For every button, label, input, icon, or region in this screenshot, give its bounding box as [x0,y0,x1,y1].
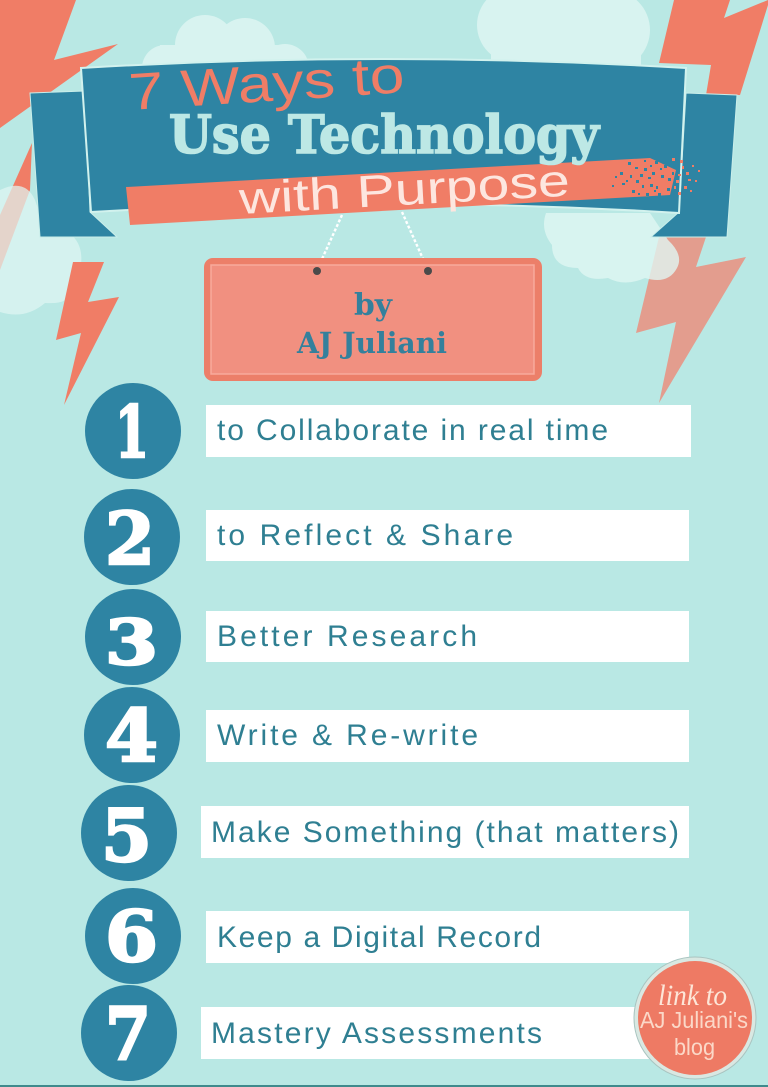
list item 6: Keep a Digital Record [217,921,541,954]
list item 1 [85,383,691,479]
stripe speckle [612,160,674,196]
list item 5: 5 [101,793,152,878]
list item 2: to Reflect & Share [217,519,513,552]
lightning bolt: small left [56,262,119,405]
lightning bolt: lower right pale [636,237,746,403]
list item 5 [81,785,689,881]
author text: by [354,288,394,323]
cloud: left [0,186,81,315]
heading: Use Technology: Use Technology [169,105,601,166]
sign strings [317,212,428,270]
ribbon left tail [30,91,117,237]
list item 4 [84,687,689,783]
ribbon right tail [651,93,737,237]
list item 3 [85,589,689,685]
list item 4: 4 [105,693,158,778]
salmon stripe [126,158,676,225]
list item 4: Write & Re-write [217,719,478,752]
cloud: top centre [142,15,309,92]
author sign [204,258,542,381]
cloud: right [544,213,679,282]
ribbon banner [30,46,737,237]
list item 2 [84,489,689,585]
heading: with Purpose: with Purpose [236,155,571,224]
lightning bolt: top right [659,0,768,95]
list item 7: Mastery Assessments [211,1017,542,1050]
blog link badge: AJ Juliani's [640,1007,748,1033]
blog link badge: link to [658,979,727,1012]
list item 5: Make Something (that matters) [211,816,679,849]
blog link badge: blog [674,1034,715,1060]
lightning bolt: left lower [0,143,32,270]
cloud: top right [477,0,650,70]
bottom edge line [0,1085,768,1087]
list item 6 [85,888,689,984]
sign holes [313,267,432,275]
list item 3: Better Research [217,620,477,653]
list item 3: 3 [105,606,158,679]
list item 7: 7 [105,991,151,1076]
list item 7 [81,985,651,1081]
author sign: AJ Juliani [296,326,447,360]
list item 1: 1 [115,390,149,474]
list item 2: 2 [105,496,155,581]
ribbon main band [81,59,686,213]
blog link badge [634,957,756,1079]
list item 1: to Collaborate in real time [217,414,608,447]
lightning bolt: top left [0,0,118,128]
list item 6: 6 [105,895,158,978]
heading: 7 Ways to: 7 Ways to [127,46,406,122]
